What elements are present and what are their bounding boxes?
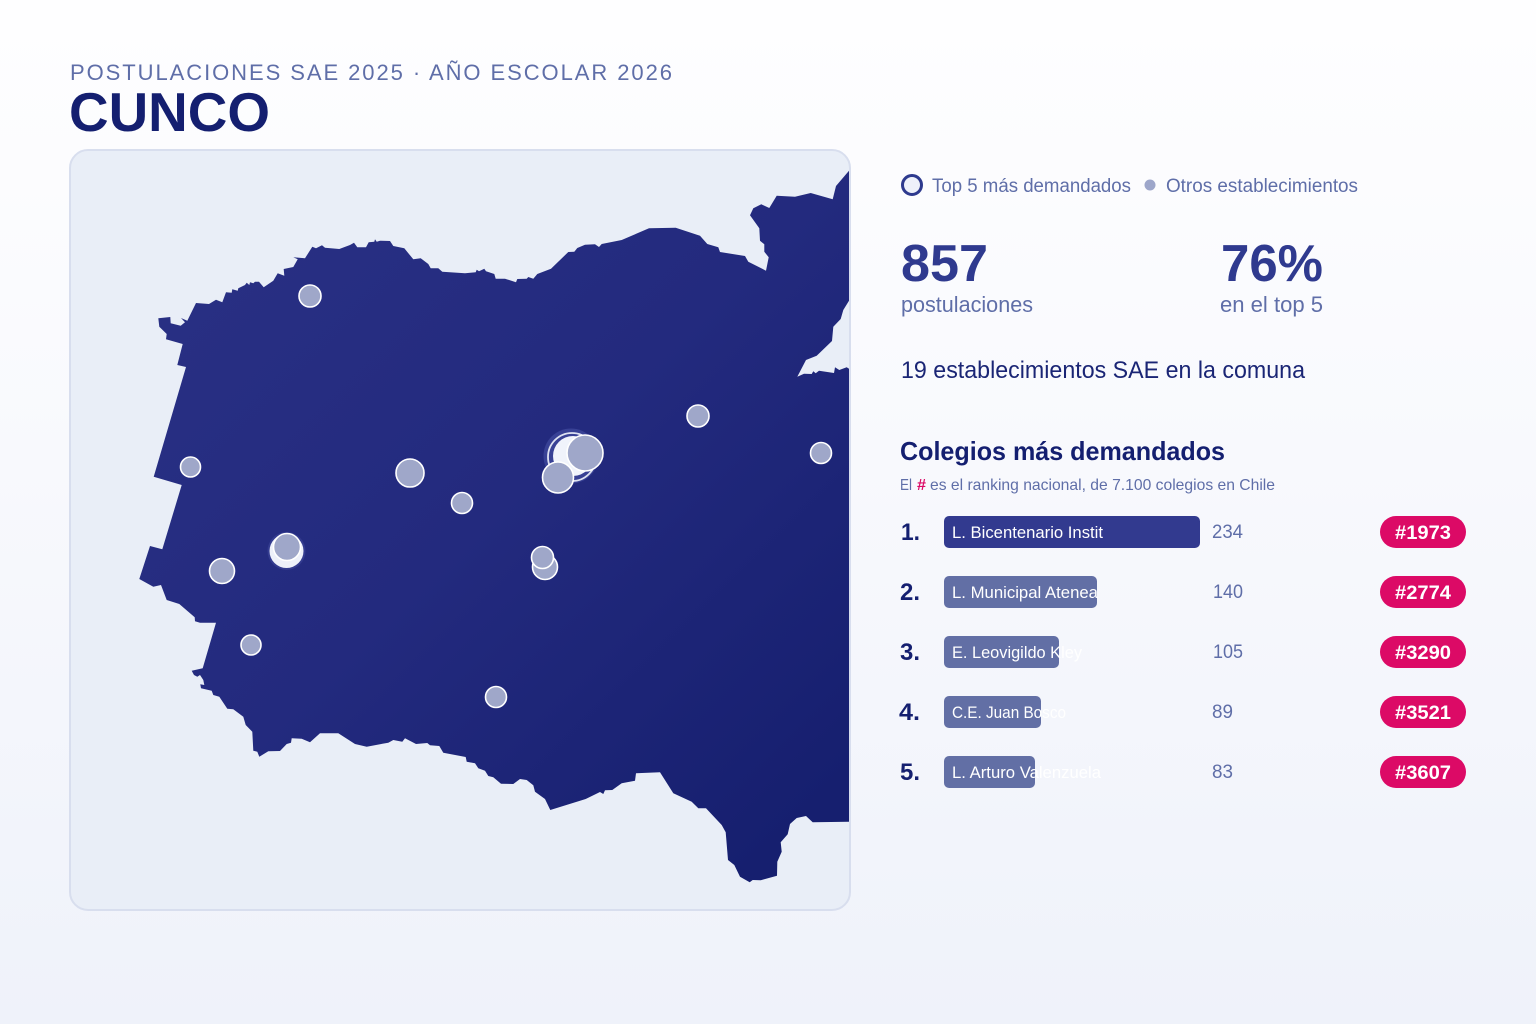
- ranking note: #: [917, 477, 926, 494]
- ranking row 5: #3607: [1395, 763, 1451, 784]
- top 5 marker: central cluster: [544, 428, 598, 484]
- establishment markers: [180, 285, 832, 708]
- ranking row 3: E. Leovigildo Kley: [952, 643, 1082, 662]
- ranking row 2: L. Municipal Atenea: [952, 583, 1099, 602]
- establishments count: 19 establecimientos SAE en la comuna: [901, 357, 1306, 384]
- ranking row 1: 234: [1212, 522, 1243, 543]
- stat: top 5 share: 76%: [1221, 235, 1323, 293]
- stat: top 5 share: en el top 5: [1220, 292, 1323, 317]
- ranking row 2: [900, 576, 1466, 608]
- ranking row 2: 140: [1213, 582, 1243, 603]
- stat: postulaciones: 857: [901, 235, 988, 293]
- legend: Top 5 más demandados: [932, 176, 1131, 197]
- ranking row 2: 2.: [900, 579, 920, 606]
- ranking row 5: 5.: [900, 759, 920, 786]
- ranking row 1: 1.: [901, 519, 920, 546]
- legend: [902, 176, 1358, 197]
- stat: postulaciones: postulaciones: [901, 292, 1033, 317]
- ranking row 3: 105: [1213, 642, 1243, 663]
- stat: top 5 share: [1220, 235, 1323, 317]
- ranking row 4: C.E. Juan Bosco: [952, 703, 1066, 722]
- ranking row 2: #2774: [1395, 583, 1451, 604]
- ranking row 5: 83: [1212, 762, 1233, 783]
- ranking row 5: L. Arturo Valenzuela: [952, 763, 1102, 782]
- ranking row 1: #1973: [1395, 523, 1451, 544]
- ranking row 1: L. Bicentenario Instit: [952, 523, 1103, 542]
- ranking row 4: 89: [1212, 702, 1233, 723]
- ranking row 1: [901, 516, 1466, 548]
- stat: postulaciones: [901, 235, 1033, 317]
- ranking row 4: 4.: [899, 699, 920, 726]
- ranking row 3: #3290: [1395, 643, 1451, 664]
- top 5 marker: west: [268, 532, 306, 570]
- ranking heading: Colegios más demandados: [900, 436, 1225, 466]
- map: comuna shape: [139, 171, 849, 882]
- ranking row 5: [900, 756, 1466, 788]
- subtitle: POSTULACIONES SAE 2025 · AÑO ESCOLAR 2026: [70, 60, 672, 85]
- legend: Otros establecimientos: [1166, 176, 1358, 197]
- ranking note: El: [900, 477, 912, 494]
- ranking row 3: 3.: [900, 639, 920, 666]
- ranking row 3: [900, 636, 1466, 668]
- ranking note: es el ranking nacional, de 7.100 colegios en Chile: [930, 477, 1275, 494]
- ranking row 4: #3521: [1395, 703, 1451, 724]
- title: CUNCO: [69, 81, 270, 143]
- panel: map: [70, 150, 850, 910]
- ranking row 4: [899, 696, 1466, 728]
